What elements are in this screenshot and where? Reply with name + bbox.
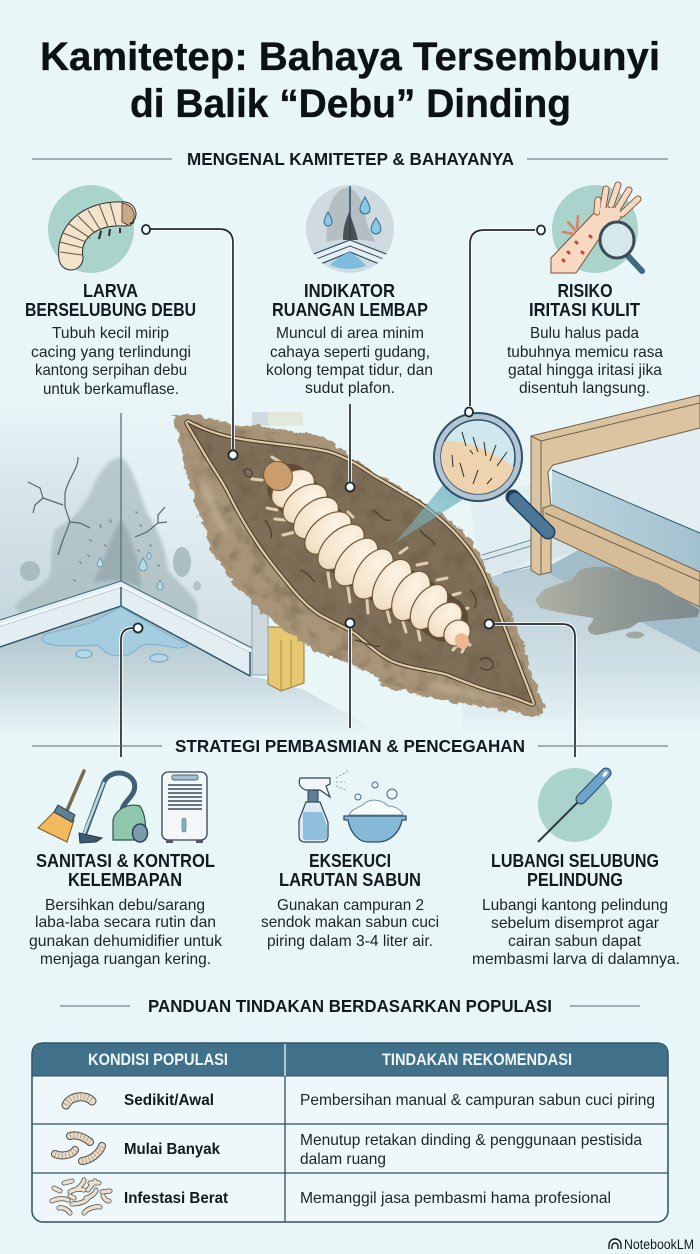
row: sedikit: Pembersihan manual & campuran sabun cuci piring: [300, 1092, 655, 1109]
text: damp description: [266, 325, 433, 397]
row: infestasi berat: Infestasi Berat: [124, 1190, 229, 1207]
mold dark core: [93, 520, 142, 588]
table: population guide: KONDISI POPULASI: [88, 1051, 228, 1069]
text: soap description: [261, 897, 439, 950]
label: damp indicator: RUANGAN LEMBAP: [272, 300, 428, 320]
illustration: scene background: [0, 395, 700, 736]
text: larva description: cacing yang terlindungi: [31, 344, 191, 361]
text: pierce description: membasmi larva di dalamnya.: [472, 951, 680, 968]
table: population guide: TINDAKAN REKOMENDASI: [382, 1051, 572, 1069]
row: mulai banyak: Menutup retakan dinding & penggunaan pestisida: [300, 1132, 642, 1149]
label: larva: LARVA: [83, 281, 138, 301]
logo: NotebookLM: NotebookLM: [624, 1237, 694, 1252]
row: infestasi berat: [52, 1180, 611, 1213]
text: pierce description: Lubangi kantong pelindung: [482, 897, 668, 914]
right wall tone: [470, 440, 700, 620]
text: larva description: kantong serpihan debu: [35, 362, 187, 379]
label: larva: BERSELUBUNG DEBU: [25, 300, 196, 320]
icon: spray bottle and soap bowl: [299, 771, 406, 842]
label: skin irritation: RISIKO: [558, 281, 612, 301]
text: skin irritation description: disentuh langsung.: [519, 380, 650, 397]
text: soap description: piring dalam 3-4 liter air.: [267, 933, 433, 950]
mold specks: [74, 512, 159, 581]
text: damp description: sudut plafon.: [305, 380, 395, 397]
soap bowl: [349, 800, 403, 815]
icon: broom, vacuum, dehumidifier: [38, 771, 207, 843]
text: sanitation description: menjaga ruangan kering.: [40, 951, 211, 968]
table: population guide: [32, 1043, 668, 1222]
right floor: [462, 566, 700, 736]
label: soap solution: EKSEKUCI: [309, 851, 391, 871]
case outer shell: [172, 413, 545, 717]
shell light patches: [200, 480, 500, 700]
heading: strategi: STRATEGI PEMBASMIAN & PENCEGAHAN: [175, 736, 525, 756]
text: soap description: sendok makan sabun cuci: [261, 914, 439, 931]
baseboard: [0, 581, 252, 676]
spray bottle: [299, 802, 328, 842]
row: mulai banyak: dalam ruang: [300, 1151, 386, 1168]
text: larva description: [31, 325, 191, 398]
case inner cavity: [188, 423, 532, 703]
label: damp indicator: [272, 281, 428, 320]
left floor: [0, 606, 372, 736]
water drops on wall: [97, 552, 163, 590]
text: damp description: cahaya seperti gudang,: [270, 344, 430, 361]
label: skin irritation: [529, 281, 640, 320]
left wall: [0, 400, 121, 622]
larva segments: [264, 462, 475, 651]
heading: panduan: PANDUAN TINDAKAN BERDASARKAN POPULASI: [148, 996, 552, 1016]
label: damp indicator: INDIKATOR: [304, 281, 395, 301]
case inner band: [188, 423, 532, 703]
title: Kamitetep: Bahaya Tersembunyi: [40, 35, 660, 79]
larva tail: [452, 631, 472, 651]
label: soap solution: [279, 851, 421, 890]
text: damp description: kolong tempat tidur, dan: [266, 362, 433, 379]
mold stain: [15, 457, 198, 622]
title: [40, 35, 660, 126]
row: mulai banyak: Mulai Banyak: [124, 1141, 220, 1158]
label: pierce the case: PELINDUNG: [527, 870, 623, 890]
illustration: opened dust case: [172, 413, 545, 717]
vacuum: [84, 773, 135, 836]
label: sanitation: KELEMBAPAN: [68, 870, 182, 890]
label: skin irritation: IRITASI KULIT: [529, 300, 640, 320]
larva body underlay: [290, 487, 445, 619]
wood stud top: [252, 412, 303, 426]
corner line: [120, 413, 122, 582]
text: skin irritation description: [507, 325, 663, 397]
icon: needle: [538, 768, 612, 842]
right baseboard: [482, 540, 531, 573]
cavity texture: [188, 423, 532, 703]
magnifier cone: [395, 485, 462, 543]
icon: damp corner: [306, 185, 394, 273]
row: mulai banyak: [55, 1132, 642, 1168]
label: soap solution: LARUTAN SABUN: [279, 870, 421, 890]
dehumidifier: [162, 772, 207, 840]
text: larva description: untuk berkamuflase.: [43, 381, 179, 398]
broom: [65, 771, 84, 815]
magnifying glass with hair close-up: [434, 413, 548, 532]
text: pierce description: [472, 897, 680, 968]
text: skin irritation description: gatal hingga iritasi jika: [508, 362, 662, 379]
table body: [32, 1043, 668, 1222]
text: sanitation description: [29, 897, 223, 968]
wall cracks: [28, 457, 167, 555]
row: sedikit: [66, 1092, 655, 1109]
wall edge: [252, 600, 268, 675]
wood stud bottom: [268, 627, 304, 691]
side rail: [543, 505, 700, 607]
text: skin irritation description: tubuhnya memicu rasa: [507, 344, 663, 361]
icon: larva: [48, 185, 134, 273]
label: pierce the case: [491, 851, 659, 890]
text: pierce description: sebelum disemprot agar: [491, 915, 660, 932]
text: soap description: Gunakan campuran 2: [277, 897, 424, 914]
label: pierce the case: LUBANGI SELUBUNG: [491, 851, 659, 871]
text: sanitation description: gunakan dehumidifier untuk: [29, 933, 223, 950]
mattress side: [552, 470, 700, 572]
text: damp description: Muncul di area minim: [276, 325, 424, 342]
text: pierce description: cairan sabun dapat: [508, 933, 642, 950]
shell texture: [176, 418, 540, 712]
icon: skin irritation: [551, 185, 642, 273]
larva legs: [252, 457, 470, 652]
mattress top: [552, 428, 700, 533]
row: infestasi berat: Memanggil jasa pembasmi hama profesional: [300, 1190, 611, 1207]
puddle: [42, 607, 188, 656]
text: sanitation description: Bersihkan debu/sarang: [45, 897, 205, 914]
under-bed shadow: [542, 550, 700, 653]
label: larva: [25, 281, 196, 320]
label: sanitation: SANITASI & KONTROL: [36, 851, 215, 871]
connector lines and markers: [121, 229, 575, 757]
dust stain on floor: [535, 567, 700, 635]
larva head: [258, 456, 298, 496]
text: larva description: Tubuh kecil mirip: [52, 325, 169, 342]
table header: [32, 1043, 668, 1076]
row: sedikit: Sedikit/Awal: [124, 1092, 214, 1109]
heading: mengenal kamitetep: MENGENAL KAMITETEP & BAHAYANYA: [187, 149, 514, 169]
title: di Balik “Debu” Dinding: [130, 82, 571, 126]
label: sanitation: [36, 851, 215, 890]
connector nodes: [134, 225, 545, 632]
text: skin irritation description: Bulu halus pada: [530, 325, 639, 342]
cavity wrinkles: [244, 469, 493, 670]
text: sanitation description: laba-laba secara rutin dan: [35, 914, 216, 931]
headboard: [531, 395, 700, 575]
